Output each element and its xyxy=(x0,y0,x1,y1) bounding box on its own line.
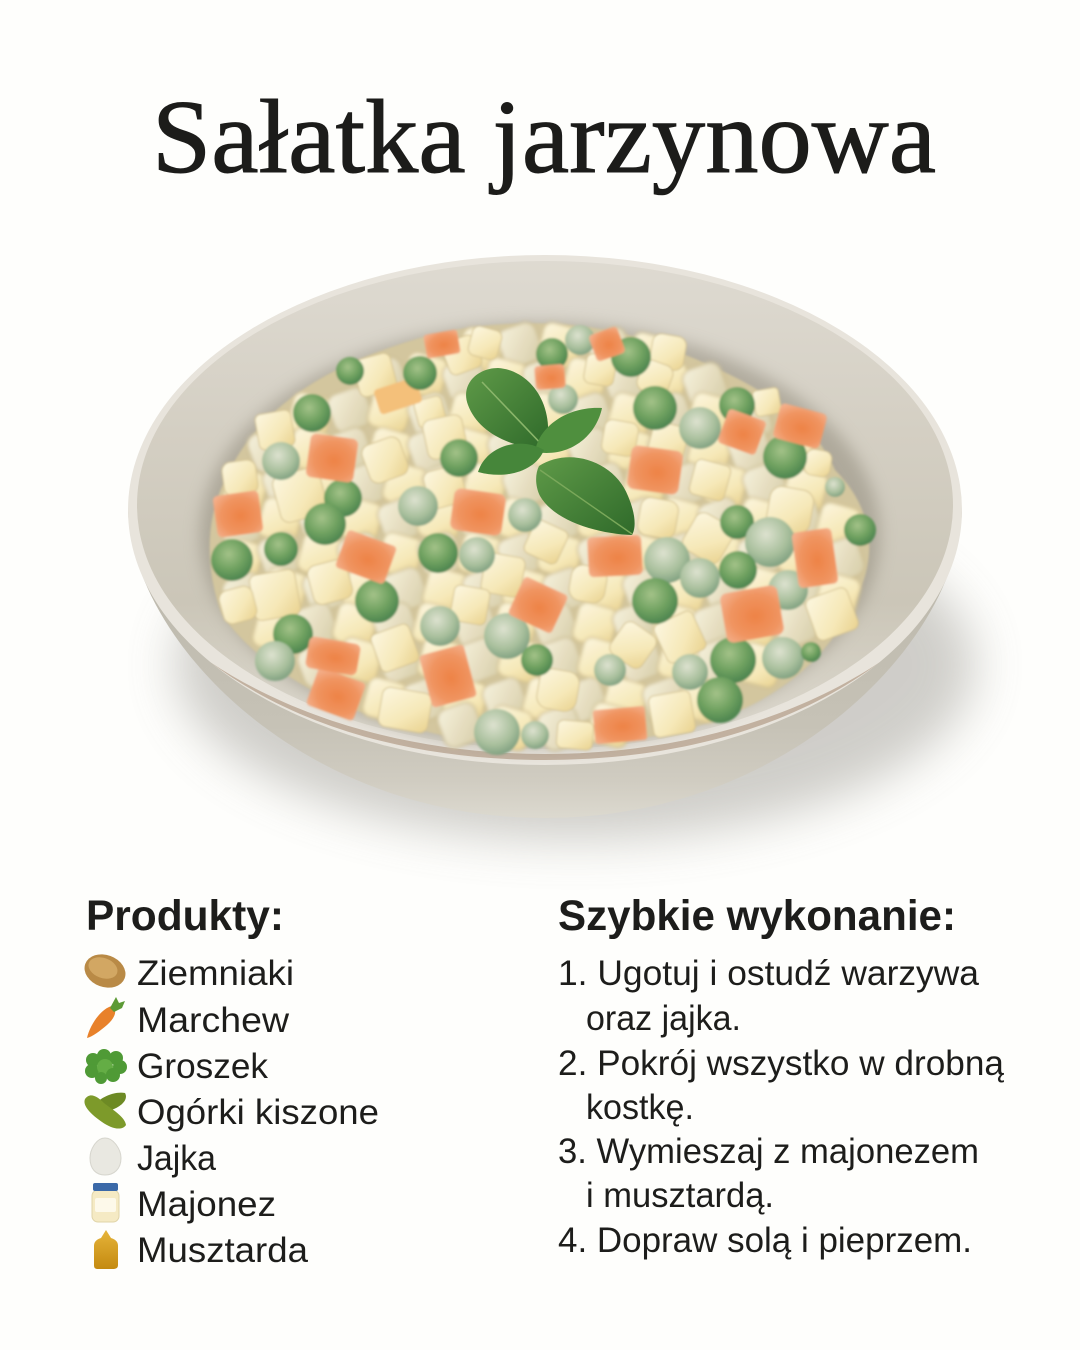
bowl body xyxy=(128,510,962,818)
peas xyxy=(211,325,876,755)
step 3 xyxy=(558,1132,979,1215)
step 3: i musztardą. xyxy=(586,1176,774,1215)
step 4: 4. Dopraw solą i pieprzem. xyxy=(558,1221,972,1260)
step 1: 1. Ugotuj i ostudź warzywa xyxy=(558,954,980,993)
ingredient: potatoes: Ziemniaki xyxy=(137,954,294,993)
orange-yellow cube xyxy=(373,377,423,415)
basil leaves xyxy=(466,368,635,535)
ingredient: pickles: Ogórki kiszone xyxy=(137,1093,379,1132)
icon: peas xyxy=(85,1049,127,1084)
step 1: oraz jajka. xyxy=(586,999,741,1038)
ingredient: peas: Groszek xyxy=(137,1047,269,1086)
instructions heading: Szybkie wykonanie: xyxy=(558,892,956,940)
icon: pickles xyxy=(84,1093,126,1129)
bowl shadow xyxy=(175,490,975,840)
instructions panel xyxy=(558,892,1005,1260)
step 2 xyxy=(558,1044,1005,1127)
ingredient: eggs: Jajka xyxy=(137,1139,217,1178)
ingredient: mayonnaise: Majonez xyxy=(137,1185,276,1224)
step 1 xyxy=(558,954,980,1038)
salad base xyxy=(210,323,869,745)
icon: egg xyxy=(90,1138,121,1175)
icon: carrot xyxy=(87,997,125,1038)
bowl with salad xyxy=(128,255,975,840)
rim brown edge xyxy=(210,662,880,760)
ingredients panel xyxy=(80,892,379,1270)
ingredients heading: Produkty: xyxy=(86,892,284,940)
step 2: 2. Pokrój wszystko w drobną xyxy=(558,1044,1005,1083)
icon: mayonnaise jar xyxy=(92,1183,119,1222)
potato cubes xyxy=(217,325,860,751)
leaf: bottom xyxy=(536,457,635,535)
leaf: left xyxy=(478,444,544,475)
carrot cubes xyxy=(212,326,839,744)
step 3: 3. Wymieszaj z majonezem xyxy=(558,1132,979,1171)
potato background layer xyxy=(214,319,868,754)
title: Sałatka jarzynowa xyxy=(152,78,936,195)
bowl rim xyxy=(128,255,962,765)
salad shadow xyxy=(200,323,880,747)
step 2: kostkę. xyxy=(586,1088,694,1127)
leaf: right xyxy=(535,408,602,453)
ingredient: carrot: Marchew xyxy=(137,1001,290,1040)
salad xyxy=(210,319,876,755)
bowl interior xyxy=(137,261,953,749)
icon: mustard jar xyxy=(94,1230,118,1269)
leaf: top xyxy=(466,368,548,449)
ingredient: mustard: Musztarda xyxy=(137,1231,309,1270)
icon: potato xyxy=(80,949,130,993)
